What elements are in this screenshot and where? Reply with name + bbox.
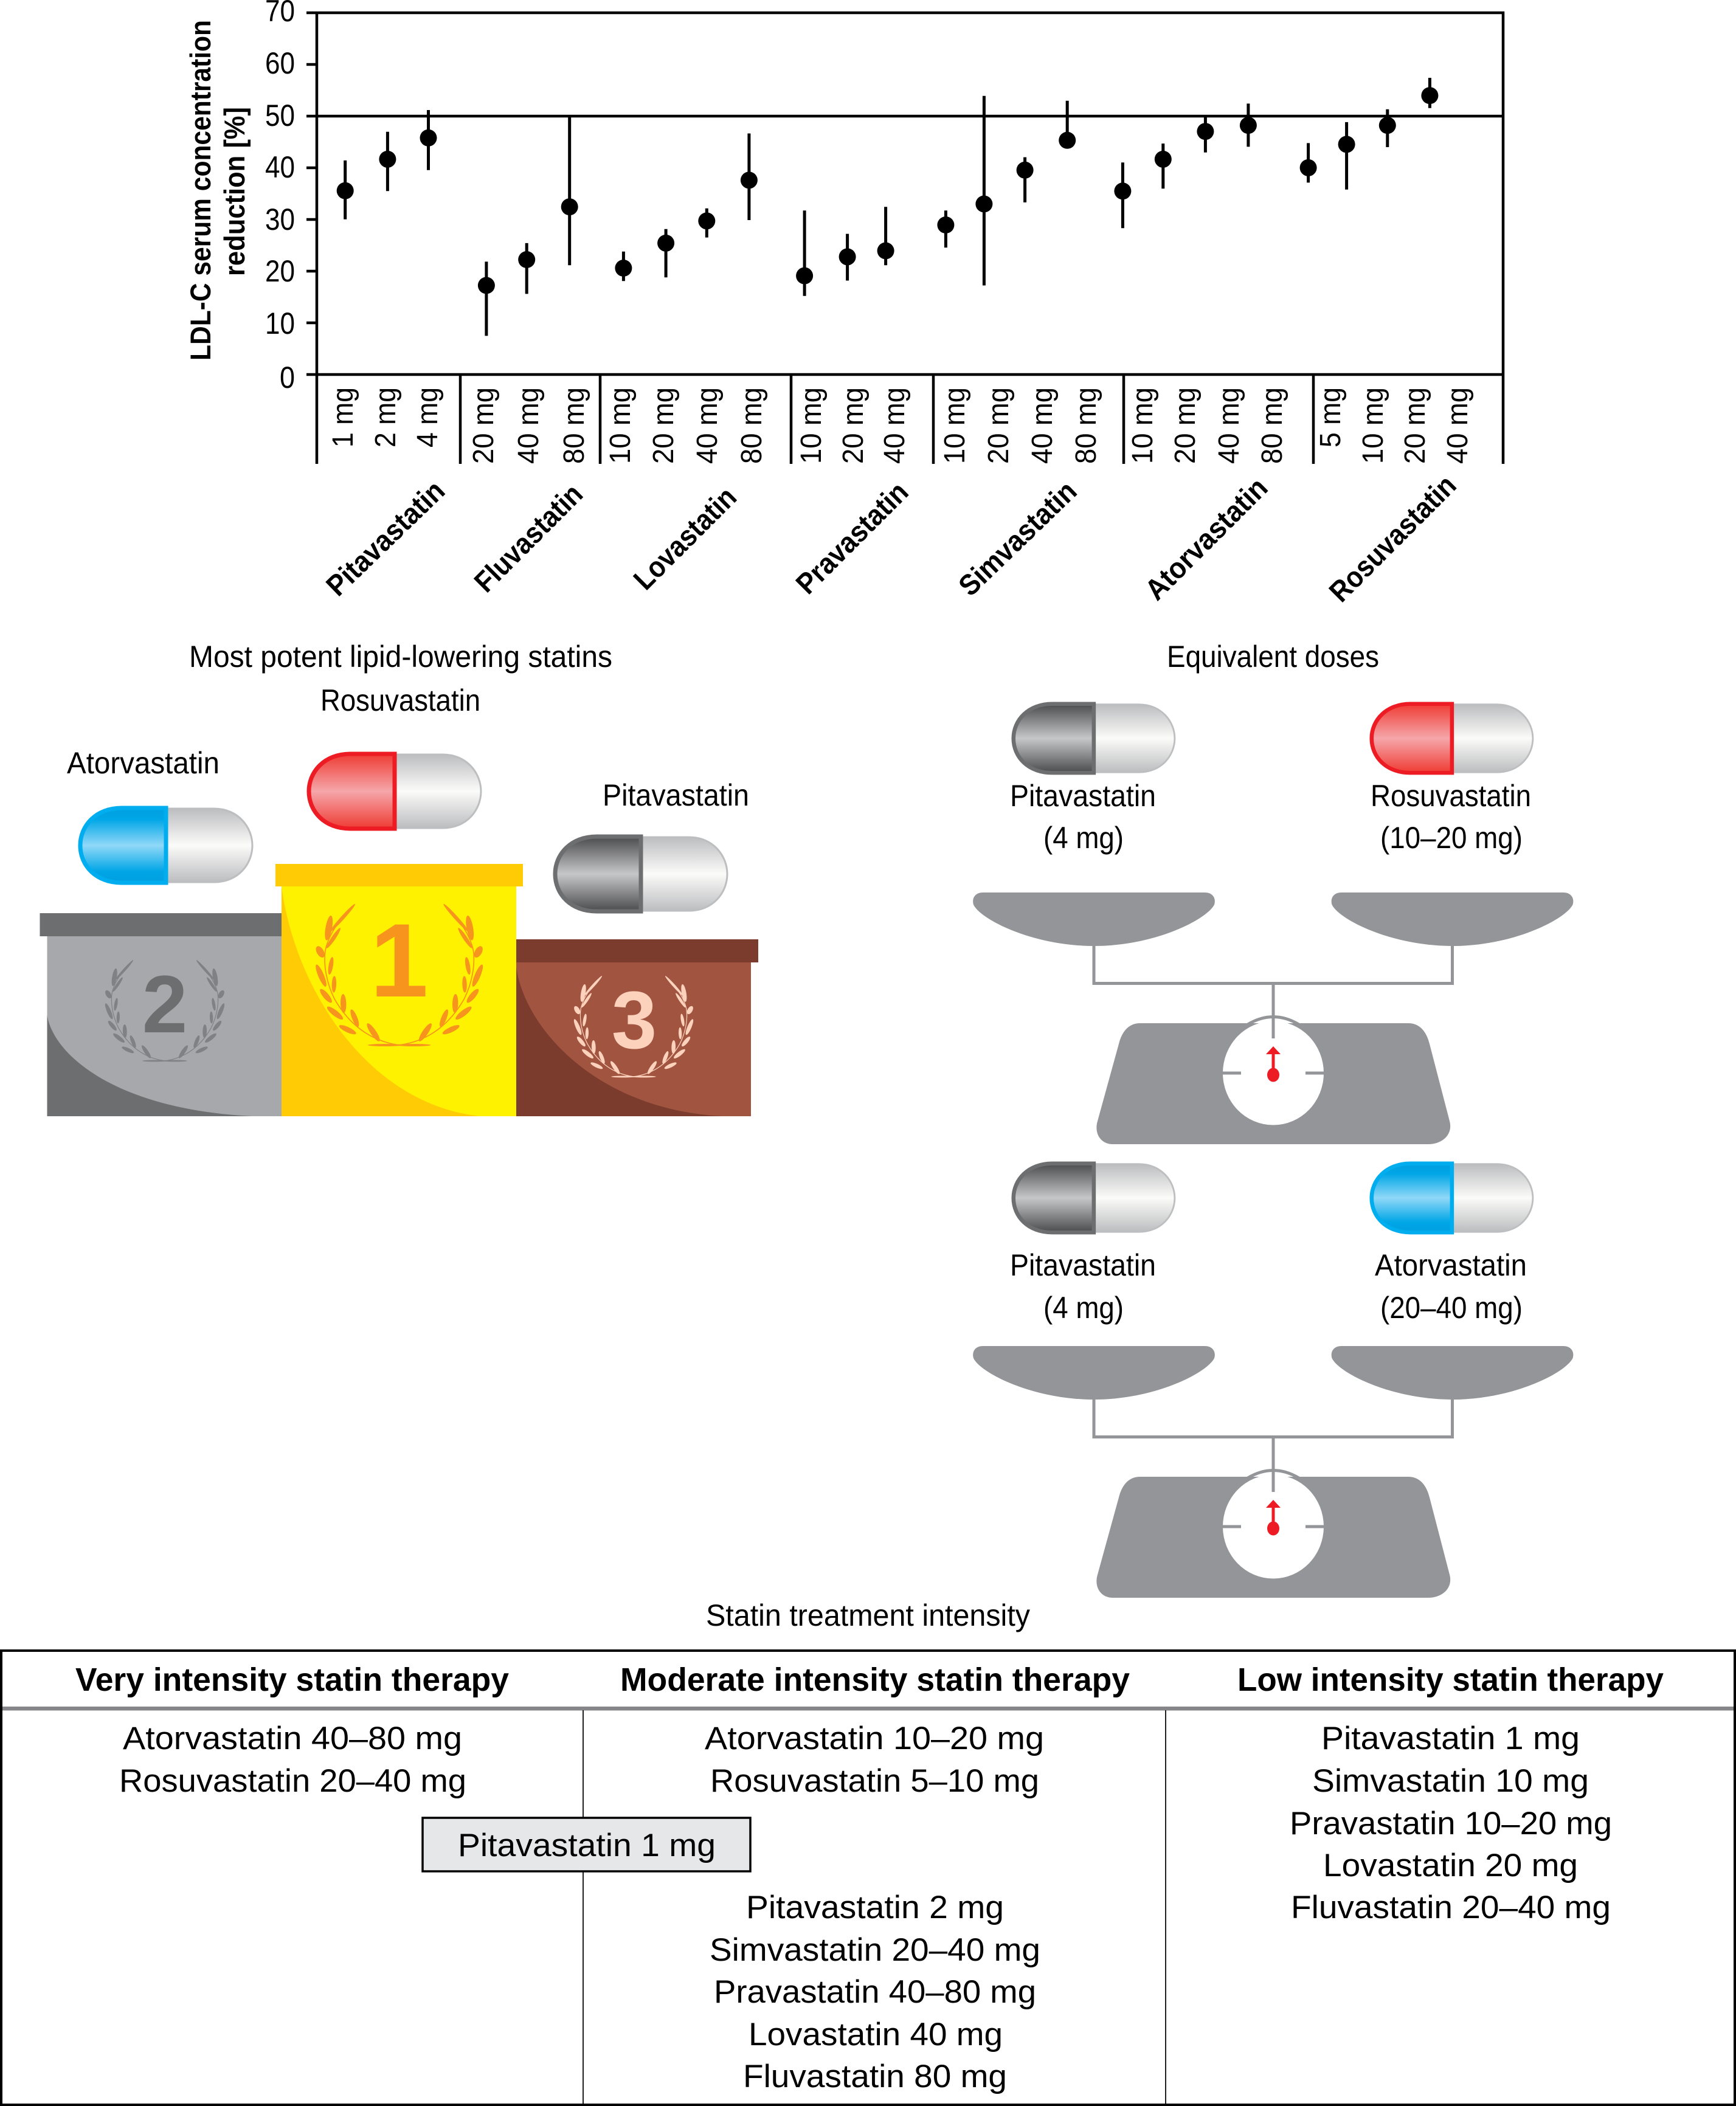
panel: most potent statins podium: [40, 640, 758, 1116]
label: Pitavastatin 4 mg: (4 mg): [1043, 821, 1124, 855]
y axis tick labels: 50: [265, 98, 295, 133]
column headings: Moderate intensity statin therapy: [620, 1662, 1130, 1698]
icon: balance scale, top: [973, 892, 1573, 1144]
podium step 3: [516, 939, 758, 1116]
podium step 2: [40, 913, 282, 1116]
dose labels: 10 mg: [1127, 387, 1159, 464]
dose labels: 80 mg: [558, 387, 590, 464]
dose labels: 20 mg: [1399, 387, 1431, 464]
data: Pitavastatin: [337, 110, 437, 219]
data: Pravastatin: [796, 207, 894, 296]
label: Atorvastatin 20-40 mg: Atorvastatin: [1375, 1248, 1527, 1282]
label: Pitavastatin 4 mg, bottom: [1010, 1248, 1156, 1325]
dose labels: 4 mg: [412, 387, 444, 447]
icon: grey capsule: [555, 837, 727, 911]
column: low intensity: Simvastatin 10 mg: [1312, 1763, 1589, 1799]
callout: Pitavastatin 1 mg: Pitavastatin 1 mg: [458, 1828, 716, 1863]
dose labels: 80 mg: [1070, 387, 1102, 464]
dose labels: 2 mg: [370, 387, 402, 447]
title: statin treatment intensity: Statin treatment intensity: [706, 1598, 1030, 1632]
dose labels: [327, 387, 1474, 464]
icon: grey capsule, bottom: [1014, 1164, 1175, 1232]
podium step 2: 2: [142, 959, 187, 1050]
column: low intensity: [1290, 1721, 1612, 1925]
dose labels: 5 mg: [1315, 387, 1347, 447]
dose labels: 1 mg: [327, 387, 359, 447]
label: Pitavastatin 4 mg: Pitavastatin: [1010, 779, 1156, 813]
label: Pitavastatin 4 mg: [1010, 779, 1156, 855]
column: moderate intensity: [705, 1721, 1044, 2094]
label: Atorvastatin 20-40 mg: (20–40 mg): [1380, 1291, 1523, 1325]
dose labels: 40 mg: [1442, 387, 1474, 464]
column: moderate intensity: Pravastatin 40–80 mg: [714, 1974, 1036, 2010]
column: low intensity: Pitavastatin 1 mg: [1321, 1721, 1580, 1756]
podium step 3: 3: [612, 975, 657, 1066]
icon: grey capsule, top: [1014, 704, 1175, 773]
column headings: Low intensity statin therapy: [1237, 1662, 1664, 1698]
y axis tick labels: 20: [265, 254, 295, 288]
dose labels: 40 mg: [1026, 387, 1059, 464]
heading: equivalent doses: Equivalent doses: [1167, 640, 1379, 674]
y axis tick labels: 30: [265, 202, 295, 236]
statin name labels: Atorvastatin: [1139, 472, 1274, 607]
label: Atorvastatin 20-40 mg: [1375, 1248, 1527, 1325]
y axis tick labels: 10: [265, 306, 295, 340]
label: Pitavastatin: Pitavastatin: [603, 778, 749, 812]
icon: blue capsule: [80, 808, 252, 883]
dose labels: 20 mg: [648, 387, 680, 464]
column: low intensity: Lovastatin 20 mg: [1323, 1848, 1578, 1883]
label: Pitavastatin 4 mg, bottom: (4 mg): [1043, 1291, 1124, 1325]
table frame and dividers: [1, 1651, 1735, 2105]
dose labels: 20 mg: [468, 387, 500, 464]
icon: red capsule: [309, 754, 481, 829]
dose labels: 10 mg: [1357, 387, 1389, 464]
label: Rosuvastatin 10-20 mg: Rosuvastatin: [1371, 779, 1531, 813]
column: low intensity: Pravastatin 10–20 mg: [1290, 1806, 1612, 1842]
data: Atorvastatin: [1114, 103, 1257, 228]
y axis tick labels: [265, 0, 295, 395]
dose labels: 10 mg: [795, 387, 828, 464]
data: Lovastatin: [615, 134, 758, 281]
label: Rosuvastatin 10-20 mg: (10–20 mg): [1380, 821, 1523, 855]
column: moderate intensity: Simvastatin 20–40 mg: [710, 1932, 1040, 1968]
dose labels: 20 mg: [1169, 387, 1202, 464]
y axis tick labels: 40: [265, 150, 295, 184]
column: very high intensity: Rosuvastatin 20–40 mg: [119, 1763, 466, 1799]
column headings: Very intensity statin therapy: [75, 1662, 509, 1698]
podium step 1: 1: [370, 902, 428, 1019]
dose labels: 40 mg: [879, 387, 911, 464]
column: moderate intensity: Atorvastatin 10–20 mg: [705, 1721, 1044, 1756]
column: moderate intensity: Pitavastatin 2 mg: [746, 1890, 1004, 1925]
column: moderate intensity: Lovastatin 40 mg: [749, 2017, 1003, 2052]
chart: LDL-C reduction by statin dose: [184, 0, 1503, 609]
column: very high intensity: [119, 1721, 466, 1799]
data: Simvastatin: [937, 96, 1076, 286]
y axis title: [184, 20, 251, 361]
column: moderate intensity: Rosuvastatin 5–10 mg: [710, 1763, 1039, 1799]
column: low intensity: Fluvastatin 20–40 mg: [1291, 1890, 1611, 1925]
dose labels: 40 mg: [691, 387, 724, 464]
dose labels: 20 mg: [837, 387, 870, 464]
dose labels: 80 mg: [736, 387, 768, 464]
icon: balance scale, bottom: [973, 1346, 1573, 1598]
callout: Pitavastatin 1 mg: [423, 1818, 750, 1871]
label: Rosuvastatin 10-20 mg: [1371, 779, 1531, 855]
statin name labels: [320, 469, 1462, 609]
plot frame and axes: [306, 13, 1503, 464]
data: Fluvastatin: [478, 116, 578, 336]
statin name labels: Fluvastatin: [468, 478, 589, 599]
icon: red capsule, top: [1372, 704, 1533, 773]
statin name labels: Pitavastatin: [320, 475, 451, 602]
label: Atorvastatin: Atorvastatin: [67, 746, 220, 780]
podium step 1: [275, 864, 523, 1116]
column: moderate intensity: Fluvastatin 80 mg: [743, 2059, 1007, 2094]
y axis title: reduction [%]: [218, 107, 251, 276]
column: very high intensity: Atorvastatin 40–80 mg: [123, 1721, 462, 1756]
label: Rosuvastatin: Rosuvastatin: [320, 683, 480, 717]
statin name labels: Lovastatin: [628, 481, 743, 596]
y axis tick labels: 0: [280, 361, 295, 395]
statin name labels: Pravastatin: [790, 476, 915, 601]
y axis tick labels: 60: [265, 46, 295, 80]
label: Pitavastatin 4 mg, bottom: Pitavastatin: [1010, 1248, 1156, 1282]
panel: equivalent doses: [973, 640, 1573, 1598]
dose labels: 10 mg: [604, 387, 637, 464]
data: Rosuvastatin: [1300, 78, 1438, 190]
heading: most potent: Most potent lipid-lowering statins: [189, 640, 612, 674]
dose labels: 40 mg: [1213, 387, 1245, 464]
dose labels: 20 mg: [983, 387, 1015, 464]
table: treatment intensity: [1, 1651, 1735, 2105]
statin name labels: Simvastatin: [953, 475, 1083, 602]
icon: blue capsule, bottom: [1372, 1164, 1533, 1232]
dose labels: 10 mg: [939, 387, 971, 464]
column headings: [75, 1662, 1664, 1698]
dose labels: 40 mg: [513, 387, 545, 464]
dose labels: 80 mg: [1256, 387, 1288, 464]
statin name labels: Rosuvastatin: [1323, 469, 1462, 609]
